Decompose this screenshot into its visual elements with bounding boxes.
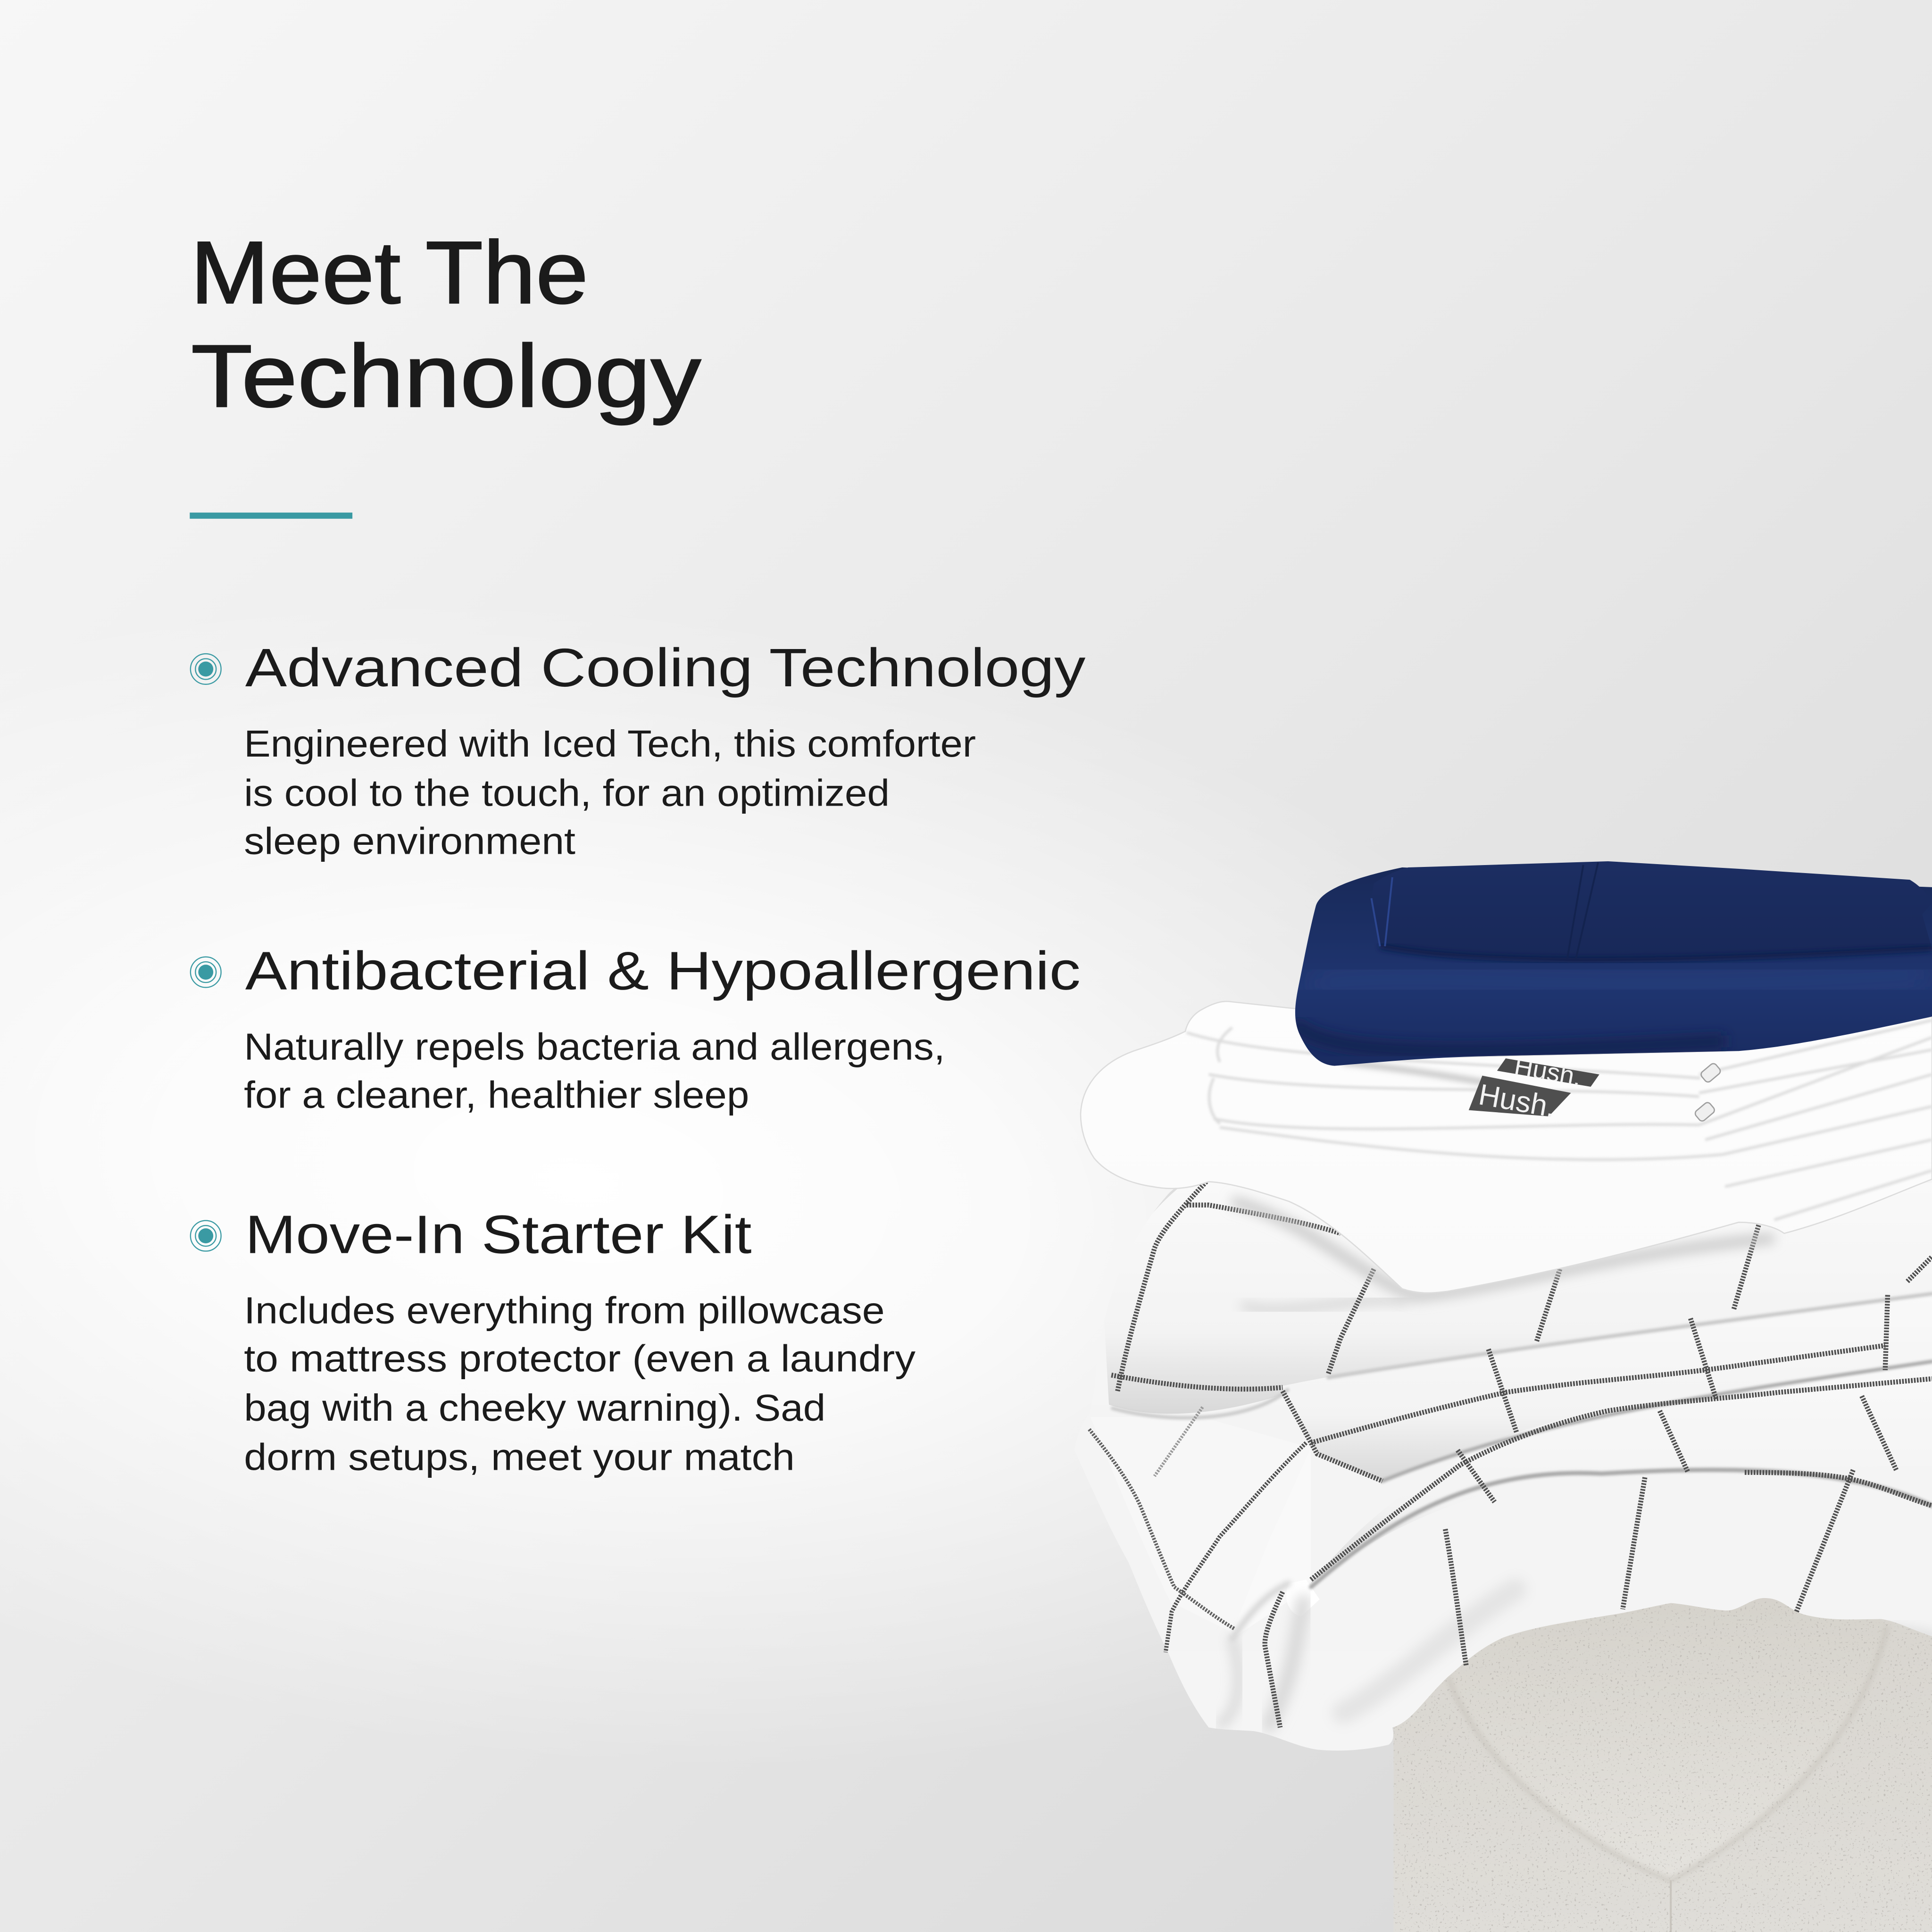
icon: target bullet: [191, 654, 221, 684]
feature: starter kit: to mattress protector (even a laundry: [244, 1337, 916, 1379]
title: [191, 223, 701, 425]
navy sheet set: [1294, 861, 1932, 1066]
feature: starter kit: Includes everything from pillowcase: [244, 1290, 885, 1332]
title: Technology: [191, 326, 701, 425]
product photo: bedding stack on stone pedestal: [1074, 861, 1932, 1932]
zipper pulls: [1694, 1062, 1722, 1123]
brand labels: Hush.: [1476, 1078, 1558, 1124]
comforter: [1074, 1171, 1932, 1750]
feature: antibacterial: for a cleaner, healthier sleep: [244, 1074, 749, 1116]
icon: target bullet: [191, 957, 221, 987]
brand labels: [1469, 1058, 1599, 1117]
feature: advanced cooling: is cool to the touch, for an optimized: [244, 772, 890, 814]
window-pane stripes: [1089, 1182, 1932, 1727]
feature: starter kit: [191, 1205, 916, 1478]
feature: starter kit: bag with a cheeky warning). Sad: [244, 1387, 825, 1429]
feature: advanced cooling: sleep environment: [244, 820, 575, 862]
quilted fold lines: [1187, 1020, 1932, 1220]
feature: advanced cooling: Advanced Cooling Technology: [245, 638, 1086, 698]
feature: advanced cooling: [191, 638, 1086, 862]
feature: starter kit: Move-In Starter Kit: [245, 1205, 752, 1265]
white mattress protector and pillow: [1081, 1001, 1932, 1296]
brand labels: Hush.: [1512, 1051, 1584, 1092]
feature: antibacterial: [191, 941, 1081, 1116]
feature: antibacterial: Naturally repels bacteria and allergens,: [244, 1026, 945, 1068]
feature: advanced cooling: Engineered with Iced Tech, this comforter: [244, 723, 976, 765]
contact shadow: [1232, 1201, 1774, 1296]
comforter layers: [1106, 1351, 1924, 1651]
title: Meet The: [191, 223, 588, 322]
feature: antibacterial: Antibacterial & Hypoallergenic: [245, 941, 1081, 1001]
stone pedestal: [1393, 1590, 1932, 1932]
accent rule: [190, 513, 352, 519]
feature: starter kit: dorm setups, meet your match: [244, 1436, 795, 1478]
icon: target bullet: [191, 1221, 221, 1251]
comforter fold shading: [1097, 1183, 1932, 1725]
